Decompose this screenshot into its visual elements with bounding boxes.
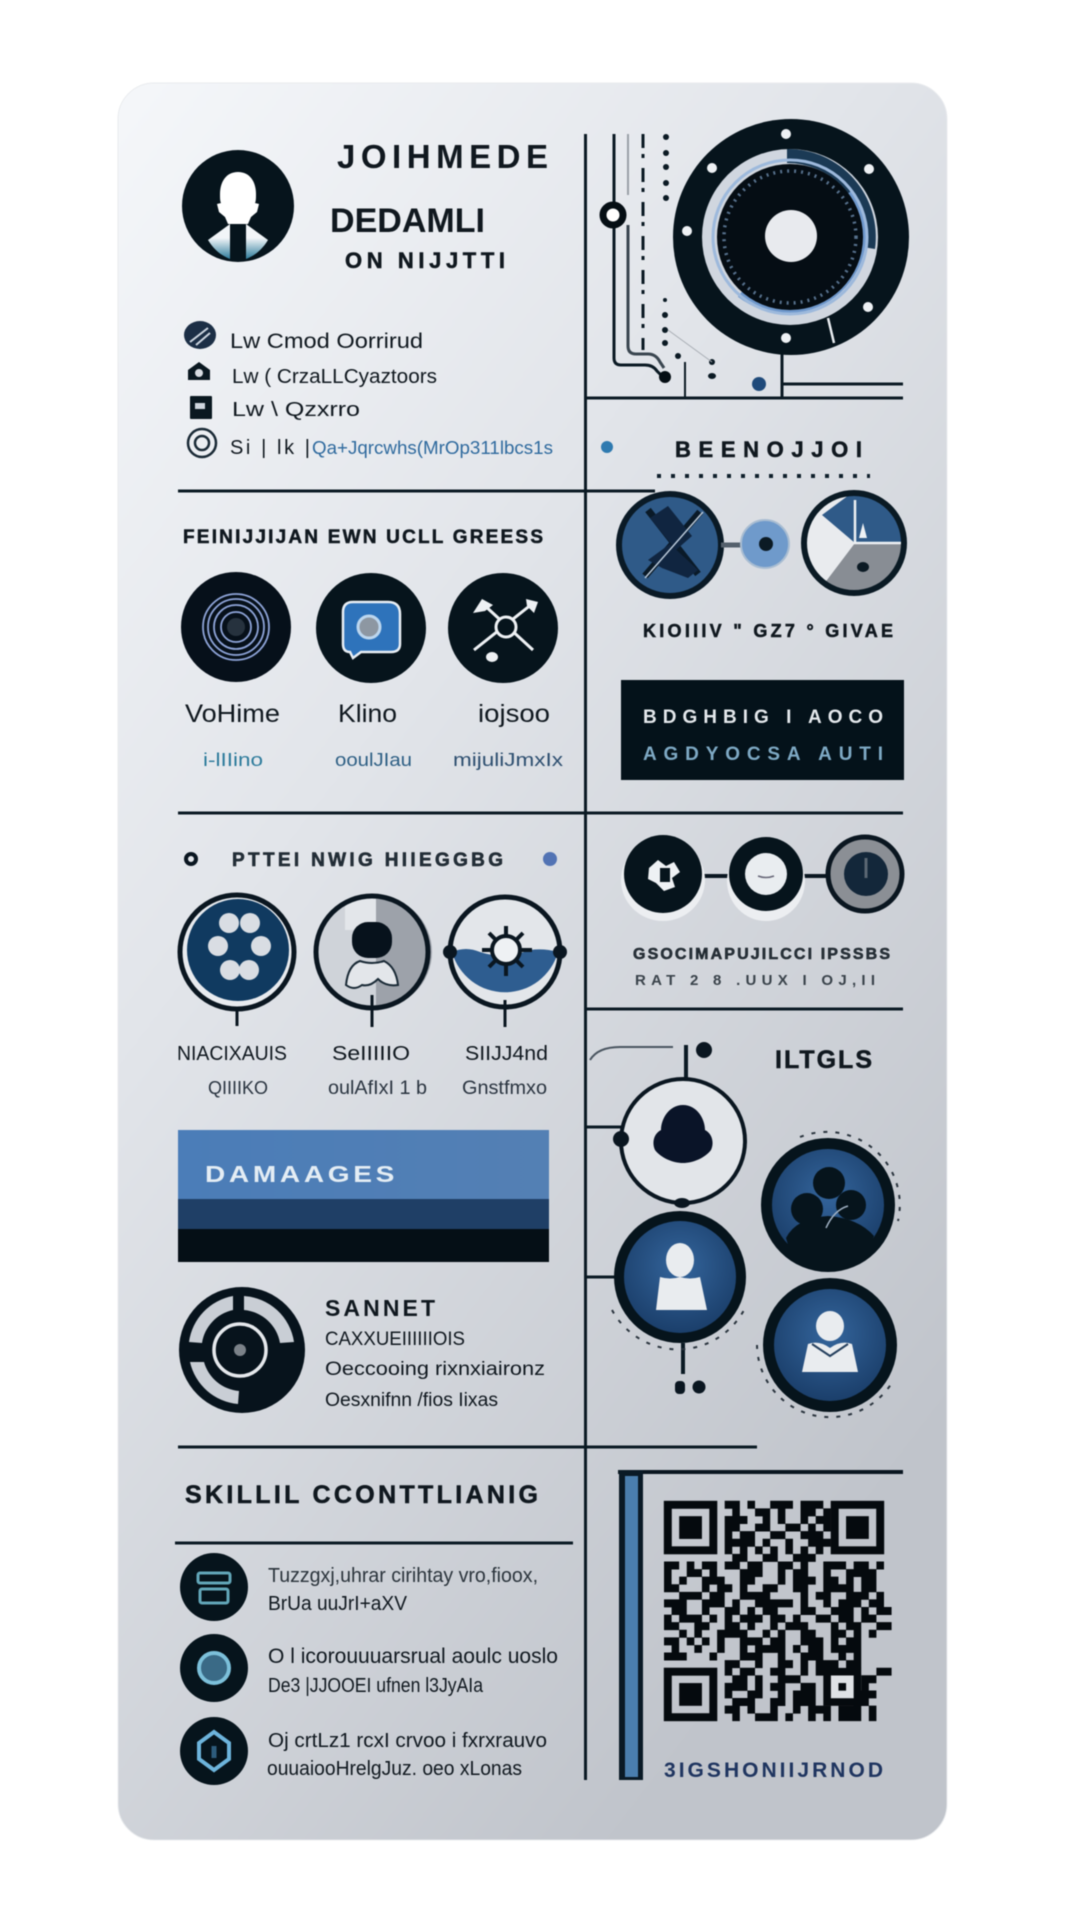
subtitle: ON NIJJTTI [345, 248, 505, 273]
panel: profile types [177, 850, 567, 1099]
heading: BEENOJJOI [675, 437, 862, 462]
heading: PTTEI NWIG HIIEGGBG [232, 850, 503, 871]
box [621, 680, 904, 780]
team heading: ILTGLS [775, 1046, 872, 1074]
caption line 1: GSOCIMAPUJILCCI IPSSBS [633, 946, 890, 963]
icon: contact 2 [188, 362, 210, 380]
panel: features [181, 527, 563, 770]
accent bar [619, 1470, 643, 1780]
icon: avatar [182, 150, 294, 262]
frame top line [618, 1470, 903, 1474]
icon: node 3 [828, 837, 902, 911]
icon: flower [180, 895, 294, 1026]
summary line 3: Oesxnifnn /fios Iixas [325, 1390, 498, 1411]
dot [696, 1042, 712, 1058]
icon: node 2 [727, 837, 805, 921]
contact 1 text: Lw Cmod Oorrirud [230, 330, 423, 353]
icon: person outline [613, 1079, 745, 1208]
skill 2 text line 1: O l icorouuuarsrual aoulc uoslo [268, 1645, 558, 1668]
panel structure lines [178, 134, 903, 1780]
heading: FEINIJJIJAN EWN UCLL GREESS [183, 527, 543, 548]
icon: skill 1 [180, 1553, 248, 1621]
sublabel 3: mijuliJmxIx [453, 750, 563, 770]
QR matrix [664, 1505, 892, 1717]
panel: target summary [179, 1287, 545, 1413]
contact 3 text: Lw \ Qzxrro [232, 399, 360, 421]
label 2: Klino [338, 700, 397, 728]
bullet right [543, 852, 557, 866]
icon: small node [741, 520, 789, 568]
skill 2 text line 2: De3 |JJOOEI ufnen l3JyAIa [268, 1675, 484, 1697]
sublabel 1: i-lIIino [203, 750, 263, 770]
panel: QR code [618, 1470, 903, 1782]
heading: SKILLIL CCONTTLIANIG [185, 1481, 538, 1509]
icon: ripple [181, 572, 291, 682]
panel: process icons [619, 493, 904, 641]
dots [675, 1380, 706, 1394]
banner dark band [178, 1229, 549, 1262]
title: second name: DEDAMLI [330, 202, 485, 240]
connector [721, 542, 745, 548]
panel: node chain [621, 835, 902, 989]
connector [700, 874, 830, 878]
icon: person blue [612, 1211, 746, 1349]
label 1 line 2: QIIIIKO [208, 1078, 268, 1098]
QR caption: 3IGSHONIIJRNOD [664, 1759, 883, 1782]
label 1: VoHime [185, 700, 280, 728]
network lines [587, 1045, 686, 1374]
caption line 2: RAT 2 8 .UUX I OJ,II [635, 972, 875, 989]
icon: circuit traces [603, 134, 716, 398]
icon: contact 1 [184, 321, 216, 349]
panel: team network [587, 1042, 900, 1417]
icon: skill 3 [180, 1717, 248, 1785]
icon: crossed tools [619, 494, 721, 596]
panel: contact list [184, 321, 553, 459]
rule [175, 1542, 573, 1544]
label 3 line 2: Gnstfmxo [462, 1078, 547, 1099]
label 3: iojsoo [478, 700, 550, 728]
skill 1 text line 2: BrUa uuJrI+aXV [268, 1593, 408, 1615]
icon: contact 4 [188, 429, 216, 457]
summary line 2: Oeccooing rixnxiaironz [325, 1359, 545, 1380]
label 1 line 1: NIACIXAUIS [177, 1043, 287, 1065]
panel: banner [178, 1130, 549, 1262]
panel: dark label box [621, 680, 904, 780]
connector lines from dial [782, 350, 903, 398]
banner middle band [178, 1199, 549, 1229]
icon: gear split [443, 897, 567, 1027]
skill 1 text line 1: Tuzzgxj,uhrar cirihtay vro,fioox, [268, 1565, 538, 1587]
banner top band [178, 1130, 549, 1199]
title: first name: JOIHMEDE [337, 138, 548, 175]
contact 2 text: Lw ( CrzaLLCyaztoors [232, 366, 437, 388]
icon: node 1 [621, 835, 705, 921]
summary line 1: CAXXUEIIIIIIOIS [325, 1329, 465, 1350]
panel: skills [175, 1481, 573, 1785]
icon: target [179, 1287, 305, 1413]
panel: recommended heading [601, 437, 870, 476]
summary title: SANNET [325, 1295, 435, 1321]
dotted rule [657, 474, 870, 478]
bullet left [186, 854, 196, 864]
label 2 line 2: oulAfIxI 1 b [328, 1078, 427, 1099]
icon: chat bubble [316, 573, 426, 683]
skill 3 text line 2: ouuaiooHrelgJuz. oeo xLonas [267, 1758, 522, 1780]
contact 4 link: Qa+Jqrcwhs(MrOp311lbcs1s [312, 438, 553, 458]
icon: person split [316, 896, 432, 1027]
icon: group [761, 1132, 900, 1272]
label 3 line 1: SIIJJ4nd [465, 1043, 548, 1065]
label line 1: BDGHBIG I AOCO [643, 707, 883, 728]
card background [118, 83, 947, 1840]
caption: KIOIIIV " GZ7 ° GIVAE [643, 621, 893, 641]
icon: blue node [752, 377, 766, 391]
sublabel 2: ooulJIau [335, 750, 412, 770]
icon: blue dot [601, 441, 613, 453]
skill 3 text line 1: Oj crtLz1 rcxI crvoo i fxrxrauvo [268, 1730, 547, 1752]
icon: contact 3 [190, 396, 212, 419]
icon: large dial [673, 119, 909, 355]
banner title: DAMAAGES [205, 1161, 398, 1187]
label 2 line 1: SeIIIIIO [332, 1043, 410, 1065]
icon: person robe [757, 1278, 897, 1417]
label line 2: AGDYOCSA AUTI [643, 744, 883, 765]
icon: skill 2 [180, 1634, 248, 1702]
panel: profile header [182, 138, 548, 273]
contact 4 prefix: Si | lk | [230, 437, 310, 459]
icon: crossed hammers [448, 573, 558, 683]
icon: pie [804, 493, 904, 593]
